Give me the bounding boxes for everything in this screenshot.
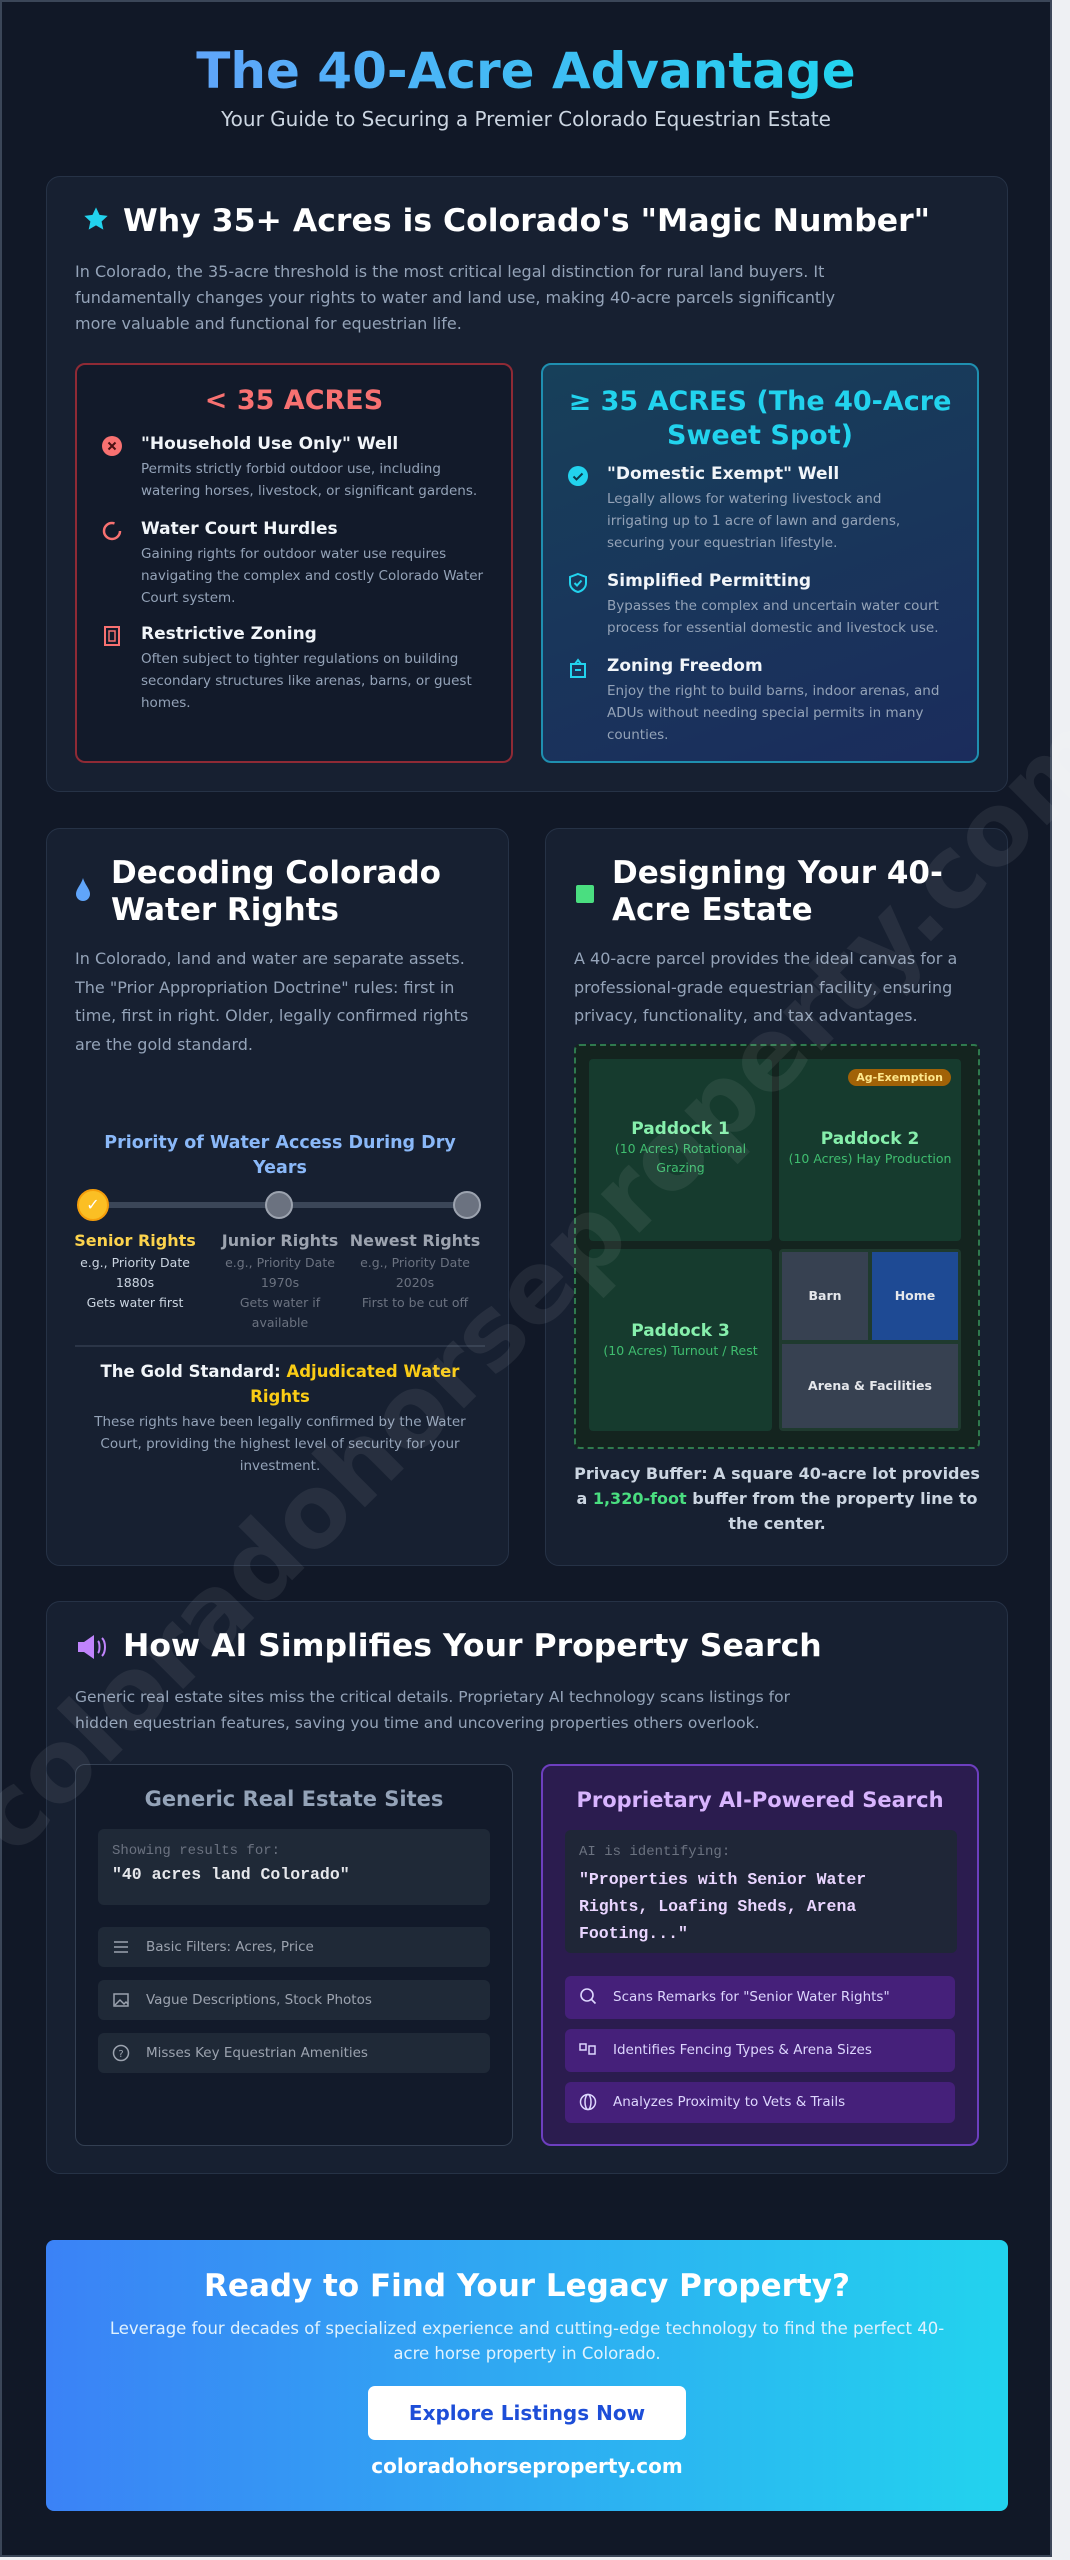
item: household well: "Household Use Only" Well	[141, 434, 398, 454]
home	[872, 1252, 958, 1340]
card: under 35	[75, 363, 513, 763]
heading: Acre Estate	[612, 892, 813, 928]
card heading: < 35 ACRES	[205, 385, 383, 416]
marker: senior: ✓	[86, 1195, 100, 1214]
item: household well: Permits strictly forbid outdoor use, including watering horses, livestock, or significant gardens.	[141, 461, 477, 499]
intro text: In Colorado, land and water are separate assets. The "Prior Appropriation Doctrine" rules: first in time, first in right. Older, legally confirmed rights are the gold standard.	[75, 949, 468, 1054]
card: generic sites	[75, 1764, 513, 2146]
item: permitting: Simplified Permitting	[607, 571, 811, 591]
label: senior: Senior Rights	[74, 1231, 196, 1250]
item: zoning: Often subject to tighter regulations on building secondary structures like arenas, barns, or guest homes.	[141, 651, 472, 711]
chart title: Priority of Water Access During Dry	[104, 1133, 456, 1153]
intro text: In Colorado, the 35-acre threshold is the most critical legal distinction for rural land buyers. It fundamentally changes your rights to water and land use, making 40-acre parcels significantly more valuable and functional for equestrian life.	[75, 262, 835, 333]
CTA button	[368, 2386, 686, 2440]
query box: "Properties with Senior Water Rights, Loafing Sheds, Arena Footing..."	[579, 1870, 866, 1943]
panel: water rights	[46, 828, 509, 1566]
panel: estate design	[545, 828, 1008, 1566]
home: Home	[895, 1288, 935, 1303]
intro text: Generic real estate sites miss the critical details. Proprietary AI technology scans listings for hidden equestrian features, saving you time and uncovering properties others overlook.	[75, 1688, 790, 1732]
item: domestic exempt	[568, 464, 900, 551]
item: zoning freedom: Zoning Freedom	[607, 656, 763, 676]
badge: ag-exemption: Ag-Exemption	[856, 1071, 943, 1084]
arena: Arena & Facilities	[808, 1378, 932, 1393]
row: basic filters	[98, 1927, 490, 1967]
paddock 3: (10 Acres) Turnout / Rest	[603, 1343, 758, 1358]
chart title	[104, 1133, 456, 1178]
row: misses amenities	[98, 2033, 490, 2073]
paddock 2: (10 Acres) Hay Production	[789, 1151, 951, 1166]
paddock 3: Paddock 3	[631, 1321, 730, 1341]
card: AI search	[541, 1764, 979, 2146]
card title: Proprietary AI-Powered Search	[576, 1788, 944, 1812]
item: zoning: Restrictive Zoning	[141, 624, 317, 644]
gold standard callout: Rights	[250, 1387, 310, 1406]
label: newest: e.g., Priority Date	[360, 1255, 470, 1270]
label: junior: Gets water if	[240, 1295, 320, 1310]
row: fencing	[565, 2029, 955, 2072]
query box: "40 acres land Colorado"	[112, 1865, 350, 1884]
subtitle: Your Guide to Securing a Premier Colorado Equestrian Estate	[221, 107, 831, 131]
query box	[565, 1830, 957, 1953]
label: junior: available	[252, 1315, 308, 1330]
label: newest: First to be cut off	[362, 1295, 468, 1310]
heading	[111, 855, 441, 928]
label: senior: Gets water first	[87, 1295, 183, 1310]
privacy buffer note: Privacy Buffer: A square 40-acre lot provides a 1,320-foot buffer from the property line to the center.	[574, 1464, 980, 1533]
paddock 2	[779, 1059, 961, 1241]
timeline chart	[74, 1133, 481, 1330]
panel: AI search	[46, 1601, 1008, 2174]
card heading: ≥ 35 ACRES (The 40-Acre	[569, 386, 951, 417]
paddock 3	[589, 1249, 772, 1431]
CTA button: Explore Listings Now	[409, 2401, 645, 2425]
item: permitting	[569, 571, 939, 636]
marker: senior	[77, 1189, 109, 1221]
intro text: A 40-acre parcel provides the ideal canvas for a professional-grade equestrian facility, ensuring privacy, functionality, and tax advantages.	[574, 949, 957, 1025]
query box: Showing results for:	[112, 1843, 280, 1859]
label: newest	[350, 1231, 480, 1310]
card title: Generic Real Estate Sites	[145, 1787, 443, 1811]
row: vague descriptions	[98, 1980, 490, 2020]
item: domestic exempt: Legally allows for watering livestock and	[607, 491, 881, 507]
card heading	[569, 386, 951, 451]
heading: Decoding Colorado	[111, 855, 441, 891]
gold standard callout	[94, 1362, 466, 1474]
paddock 1: Paddock 1	[631, 1119, 730, 1139]
heading: Designing Your 40-	[612, 855, 943, 891]
item: zoning freedom: Enjoy the right to build barns, indoor arenas, and ADUs without needing special permits in many counties.	[607, 683, 939, 743]
title: The 40-Acre Advantage	[196, 42, 856, 100]
gold standard callout: The Gold Standard: Adjudicated Water	[101, 1362, 459, 1381]
icon: star	[84, 208, 108, 230]
label: junior	[220, 1231, 338, 1330]
heading	[612, 855, 943, 928]
label: senior: 1880s	[116, 1275, 154, 1290]
item: water court: Water Court Hurdles	[141, 519, 338, 539]
item: domestic exempt: irrigating up to 1 acre of lawn and gardens,	[607, 513, 900, 529]
facilities block	[779, 1249, 961, 1431]
site plan diagram	[574, 1044, 980, 1449]
row: misses amenities: Misses Key Equestrian Amenities	[146, 2045, 368, 2061]
label: junior: e.g., Priority Date	[225, 1255, 335, 1270]
paddock 1: (10 Acres) Rotational	[615, 1141, 746, 1156]
marker: newest	[453, 1191, 481, 1219]
item: permitting: Bypasses the complex and uncertain water court process for essential domestic and livestock use.	[607, 598, 939, 636]
item: zoning freedom	[570, 656, 939, 743]
badge: ag-exemption	[848, 1069, 951, 1086]
icon: megaphone	[78, 1635, 106, 1659]
label: newest: Newest Rights	[350, 1231, 480, 1250]
CTA text: acre horse property in Colorado.	[393, 2344, 661, 2363]
card: 35 plus	[541, 363, 979, 763]
paddock 1: Grazing	[656, 1160, 705, 1175]
CTA banner	[46, 2240, 1008, 2511]
row: scans remarks	[565, 1976, 955, 2019]
website url: coloradohorseproperty.com	[371, 2454, 683, 2478]
row: vague descriptions: Vague Descriptions, Stock Photos	[146, 1992, 372, 2008]
item: water court: Gaining rights for outdoor water use requires navigating the complex and costly Colorado Water Court system.	[141, 546, 483, 606]
row: proximity	[565, 2082, 955, 2123]
query box: AI is identifying:	[579, 1844, 730, 1860]
item: water court	[102, 519, 484, 606]
label: junior: 1970s	[261, 1275, 299, 1290]
query box	[98, 1829, 490, 1905]
row: basic filters: Basic Filters: Acres, Price	[146, 1939, 314, 1955]
chart title: Years	[253, 1158, 307, 1178]
heading: How AI Simplifies Your Property Search	[123, 1628, 822, 1664]
barn: Barn	[808, 1288, 842, 1303]
CTA text	[110, 2319, 944, 2363]
row: proximity: Analyzes Proximity to Vets & Trails	[613, 2094, 845, 2110]
barn	[782, 1252, 868, 1340]
arena	[782, 1344, 958, 1428]
label: senior	[74, 1231, 196, 1310]
icon: water drop	[76, 878, 90, 901]
panel: magic number	[46, 176, 1008, 792]
label: newest: 2020s	[396, 1275, 434, 1290]
row: fencing: Identifies Fencing Types & Arena Sizes	[613, 2042, 872, 2058]
label: junior: Junior Rights	[222, 1231, 338, 1250]
item: domestic exempt: "Domestic Exempt" Well	[607, 464, 839, 484]
paddock 2: Paddock 2	[821, 1129, 919, 1149]
paddock 1	[589, 1059, 772, 1241]
row: scans remarks: Scans Remarks for "Senior Water Rights"	[613, 1989, 890, 2005]
gold standard callout: These rights have been legally confirmed by the Water Court, providing the highest level of security for your investment.	[94, 1414, 466, 1474]
card heading: Sweet Spot)	[667, 420, 853, 451]
row: misses amenities: ?	[118, 2049, 124, 2060]
CTA text: Leverage four decades of specialized experience and cutting-edge technology to find the perfect 40-	[110, 2319, 944, 2338]
heading: Water Rights	[111, 892, 339, 928]
item: zoning	[104, 624, 472, 711]
item: domestic exempt: securing your equestrian lifestyle.	[607, 535, 837, 551]
icon: green square	[576, 885, 594, 903]
marker: junior	[265, 1191, 293, 1219]
CTA heading: Ready to Find Your Legacy Property?	[204, 2268, 850, 2304]
item: household well	[102, 434, 477, 499]
heading: Why 35+ Acres is Colorado's "Magic Number"	[123, 203, 930, 239]
label: senior: e.g., Priority Date	[80, 1255, 190, 1270]
